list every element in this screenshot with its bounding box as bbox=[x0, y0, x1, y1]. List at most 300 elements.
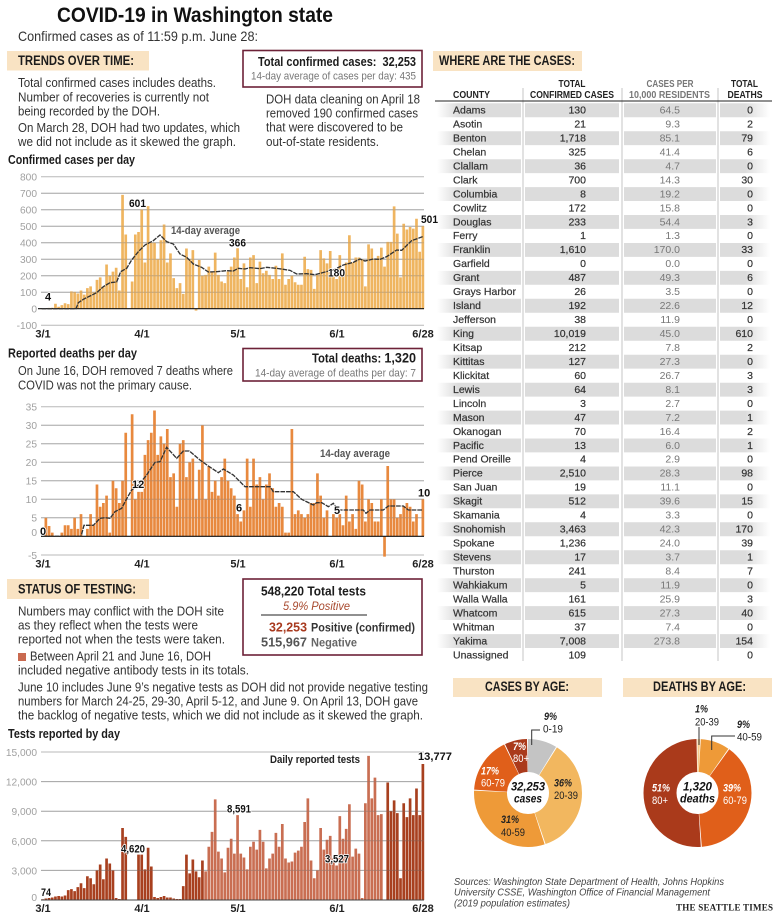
table rows: 14.3 bbox=[660, 174, 680, 186]
text block: DOH data cleaning note: out-of-state residents. bbox=[266, 135, 379, 149]
table header: DEATHS bbox=[728, 89, 762, 101]
table rows: 4.7 bbox=[665, 160, 680, 172]
heading: where are the cases bbox=[433, 51, 582, 71]
callout: total confirmed cases bbox=[243, 50, 422, 87]
table rows: 22.6 bbox=[660, 300, 680, 312]
table rows: 15 bbox=[741, 496, 753, 508]
table rows: Snohomish bbox=[453, 524, 506, 536]
table rows: Mason bbox=[453, 412, 485, 424]
table rows: 130 bbox=[568, 104, 586, 116]
x axis labels: 6/1 bbox=[329, 328, 345, 340]
table rows: San Juan bbox=[453, 482, 498, 494]
heading: status of testing bbox=[7, 579, 149, 599]
donut chart: deaths by age bbox=[652, 704, 762, 830]
callout: total deaths: Total deaths: 1,320 bbox=[312, 350, 416, 366]
table rows: 3.3 bbox=[665, 510, 680, 522]
text block: testing notes: numbers for March 24-25, 29-30, April 5-12, and June 9. On April 13, DOH gave bbox=[18, 695, 418, 709]
table rows: Unassigned bbox=[453, 649, 509, 661]
table rows: 49.3 bbox=[660, 272, 680, 284]
bar chart: confirmed cases per day: 600 bbox=[20, 206, 37, 216]
table rows: 0 bbox=[747, 258, 753, 270]
table rows: Garfield bbox=[453, 258, 490, 270]
table rows: Benton bbox=[453, 132, 486, 144]
slice labels bbox=[481, 711, 578, 839]
text block: trends notes bbox=[17, 76, 240, 149]
table rows: 2,510 bbox=[560, 468, 586, 480]
table rows: 0 bbox=[747, 230, 753, 242]
callout: testing totals: 515,967 bbox=[261, 635, 307, 650]
table rows: 40 bbox=[741, 607, 753, 619]
table rows: 45.0 bbox=[660, 328, 680, 340]
table rows: 325 bbox=[568, 146, 586, 158]
table rows: 0 bbox=[747, 160, 753, 172]
bar chart: confirmed cases per day: 300 bbox=[20, 255, 37, 266]
table rows: 98 bbox=[741, 468, 753, 480]
x axis labels: 3/1 bbox=[35, 559, 51, 571]
bar chart: reported deaths per day: 20 bbox=[26, 458, 37, 469]
table rows: 64 bbox=[574, 384, 586, 396]
table rows: Clark bbox=[453, 174, 478, 186]
table rows: 127 bbox=[568, 356, 586, 368]
value labels bbox=[45, 198, 438, 304]
table rows: 28.3 bbox=[660, 468, 680, 480]
table rows: 54.4 bbox=[660, 216, 680, 228]
table rows: 5 bbox=[580, 580, 586, 592]
slice labels: 40-59 bbox=[501, 827, 525, 839]
table rows: Klickitat bbox=[453, 370, 489, 382]
table rows: 41.4 bbox=[660, 146, 680, 158]
text block: testing notes: June 10 includes June 9’s negative tests as DOH did not provide negative testing bbox=[18, 681, 428, 695]
table rows: 170.0 bbox=[654, 244, 680, 256]
value labels: 12 bbox=[132, 479, 144, 491]
bar chart: confirmed cases per day: 500 bbox=[20, 222, 37, 233]
bar chart: confirmed cases per day: 800 bbox=[20, 172, 37, 184]
table rows: 241 bbox=[568, 566, 586, 578]
bars: daily tests including antibody tests bbox=[206, 756, 381, 900]
credit: The Seattle Times: THE SEATTLE TIMES bbox=[676, 903, 773, 913]
table rows: 39.6 bbox=[660, 496, 680, 508]
text block: testing notes: Numbers may conflict with the DOH site bbox=[18, 605, 224, 619]
table rows: 3 bbox=[580, 398, 586, 410]
callout: total confirmed cases: 14-day average of cases per day: 435 bbox=[251, 70, 416, 82]
bar chart: reported deaths per day: 25 bbox=[26, 440, 37, 451]
table rows: 2.7 bbox=[665, 398, 680, 410]
bar chart: reported deaths per day: 0 bbox=[31, 528, 37, 539]
table rows: Asotin bbox=[453, 118, 482, 130]
bar chart: confirmed cases per day: 0 bbox=[31, 304, 37, 316]
table rows: Jefferson bbox=[453, 314, 496, 326]
table rows: 0.0 bbox=[665, 258, 680, 270]
bars: daily tests bbox=[43, 764, 423, 900]
table rows: Pend Oreille bbox=[453, 454, 511, 466]
bars: daily confirmed cases bbox=[43, 195, 423, 311]
heading: cases by age: CASES BY AGE: bbox=[485, 679, 569, 694]
table rows: Chelan bbox=[453, 146, 486, 158]
x axis labels: 6/1 bbox=[329, 903, 345, 915]
table rows: 0 bbox=[580, 258, 586, 270]
value labels: 6 bbox=[236, 503, 242, 515]
value labels: 0 bbox=[40, 526, 46, 538]
table stripes bbox=[437, 103, 770, 648]
table rows: 7,008 bbox=[560, 635, 586, 647]
table rows: Columbia bbox=[453, 188, 498, 200]
table rows: Pierce bbox=[453, 468, 483, 480]
callout: total confirmed cases: Total confirmed cases: 32,253 bbox=[258, 55, 416, 69]
x axis labels: 3/1 bbox=[35, 328, 51, 340]
table rows: 21 bbox=[574, 118, 586, 130]
table rows: 19.2 bbox=[660, 188, 680, 200]
x axis labels: 3/1 bbox=[35, 903, 51, 915]
x axis labels: 5/1 bbox=[230, 328, 246, 340]
table rows: 172 bbox=[568, 202, 586, 214]
table rows: 27.3 bbox=[660, 356, 680, 368]
x axis labels bbox=[35, 559, 434, 571]
slice labels: 36% bbox=[554, 778, 572, 790]
bar chart: confirmed cases per day: 700 bbox=[20, 189, 37, 200]
sources: (2019 population estimates) bbox=[454, 898, 570, 910]
table rows: 1 bbox=[580, 230, 586, 242]
table rows: Pacific bbox=[453, 440, 484, 452]
subtitle: Confirmed cases as of 11:59 p.m. June 28: bbox=[18, 28, 258, 44]
table rows: 610 bbox=[735, 328, 753, 340]
bar chart: confirmed cases per day: 400 bbox=[20, 238, 37, 250]
value labels: 13,777 bbox=[418, 751, 452, 763]
legend swatch: antibody tests bbox=[18, 653, 26, 661]
slice labels: 1% bbox=[695, 704, 708, 716]
table rows: 0 bbox=[747, 314, 753, 326]
text block: trends notes: we did not include as it skewed the graph. bbox=[17, 135, 236, 149]
table header: CONFIRMED CASES bbox=[530, 89, 614, 101]
table header: 10,000 RESIDENTS bbox=[629, 89, 710, 101]
slice labels: 31% bbox=[501, 814, 519, 826]
text block: trends notes: On March 28, DOH had two updates, which bbox=[18, 121, 240, 135]
table rows: Stevens bbox=[453, 552, 491, 564]
table rows: 1 bbox=[747, 412, 753, 424]
table rows: 8.4 bbox=[665, 566, 680, 578]
bar chart: reported deaths per day: 35 bbox=[26, 403, 37, 414]
table rows: 512 bbox=[568, 496, 586, 508]
text block: testing notes: the backlog of negative tests, which we did not include as it skewed the graph. bbox=[18, 709, 423, 723]
x axis labels: 4/1 bbox=[134, 903, 150, 915]
callout: testing totals: 548,220 Total tests bbox=[261, 585, 366, 599]
table rows: 42.3 bbox=[660, 524, 680, 536]
callout: testing totals: Positive (confirmed) bbox=[311, 621, 415, 635]
bars: daily deaths bbox=[46, 410, 423, 557]
table rows: 2.9 bbox=[665, 454, 680, 466]
table rows bbox=[453, 104, 753, 661]
table rows: 64.5 bbox=[660, 104, 680, 116]
table rows: 109 bbox=[568, 649, 586, 661]
table rows: 4 bbox=[580, 454, 586, 466]
table rows: 26.7 bbox=[660, 370, 680, 382]
heading: deaths by age: DEATHS BY AGE: bbox=[653, 679, 746, 694]
table rows: 24.0 bbox=[660, 538, 680, 550]
table rows: 47 bbox=[574, 412, 586, 424]
table rows: 26 bbox=[574, 286, 586, 298]
x axis labels: 6/28 bbox=[412, 328, 434, 340]
bar chart: reported deaths per day: 10 bbox=[26, 495, 37, 506]
callout: total deaths bbox=[243, 348, 422, 381]
bar chart: tests reported by day: 9,000 bbox=[12, 807, 37, 818]
table rows: 1.3 bbox=[665, 230, 680, 242]
table rows: 7.8 bbox=[665, 342, 680, 354]
table rows: 2 bbox=[747, 118, 753, 130]
x axis labels: 5/1 bbox=[230, 903, 246, 915]
table rows: 2 bbox=[747, 426, 753, 438]
table rows: 36 bbox=[574, 160, 586, 172]
heading: deaths by age bbox=[623, 678, 772, 697]
donut center total bbox=[680, 780, 715, 806]
slice labels bbox=[652, 704, 762, 807]
table rows: 1,610 bbox=[560, 244, 586, 256]
line: 14-day average of deaths bbox=[43, 447, 423, 536]
table rows: 273.8 bbox=[654, 635, 680, 647]
text block: DOH data cleaning note: removed 190 confirmed cases bbox=[266, 106, 418, 120]
table rows: 0 bbox=[747, 454, 753, 466]
text block: trends notes: being recorded by the DOH. bbox=[18, 104, 160, 118]
table rows: 30 bbox=[741, 174, 753, 186]
slice labels: 9% bbox=[737, 719, 750, 731]
table rows: 79 bbox=[741, 132, 753, 144]
text block: deaths note: COVID was not the primary cause. bbox=[18, 379, 192, 393]
x axis labels: 4/1 bbox=[134, 559, 150, 571]
table rows: 85.1 bbox=[660, 132, 680, 144]
table rows: 39 bbox=[741, 538, 753, 550]
slice labels: 60-79 bbox=[723, 795, 747, 807]
text block: DOH data cleaning note: that were discovered to be bbox=[266, 120, 403, 134]
table rows: 19 bbox=[574, 482, 586, 494]
table rows: 487 bbox=[568, 272, 586, 284]
table rows: 25.9 bbox=[660, 593, 680, 605]
slice labels: 40-59 bbox=[737, 732, 762, 744]
text block: testing notes bbox=[18, 605, 428, 723]
table rows: 16.4 bbox=[660, 426, 680, 438]
table rows: 11.9 bbox=[660, 314, 680, 326]
value labels: 10 bbox=[418, 488, 430, 500]
table rows: 1,718 bbox=[560, 132, 586, 144]
value labels: 366 bbox=[229, 238, 246, 250]
table rows: Franklin bbox=[453, 244, 491, 256]
bar chart: tests reported by day: 0 bbox=[31, 893, 37, 904]
value labels: 180 bbox=[328, 268, 345, 280]
slice labels: 9% bbox=[544, 711, 557, 723]
slice labels: 20-39 bbox=[695, 716, 719, 728]
x axis labels: 6/28 bbox=[412, 903, 434, 915]
table rows: 33 bbox=[741, 244, 753, 256]
table rows: 11.9 bbox=[660, 580, 680, 592]
sources: Sources: Washington State Department of Health, Johns Hopkins bbox=[454, 876, 725, 888]
table rows: 60 bbox=[574, 370, 586, 382]
table rows: Cowlitz bbox=[453, 202, 487, 214]
table rows: Island bbox=[453, 300, 481, 312]
table rows: 6 bbox=[747, 272, 753, 284]
table rows: Kittitas bbox=[453, 356, 485, 368]
bar chart: reported deaths per day: 5 bbox=[31, 514, 37, 525]
donut center total: 1,320 bbox=[683, 780, 712, 794]
table rows: 3 bbox=[747, 384, 753, 396]
x axis labels bbox=[35, 903, 434, 915]
table rows: 1,236 bbox=[560, 538, 586, 550]
table: cases by county bbox=[435, 78, 772, 661]
table rows: 8 bbox=[580, 188, 586, 200]
heading: trends over time: TRENDS OVER TIME: bbox=[18, 53, 134, 68]
text block: trends notes: Total confirmed cases includes deaths. bbox=[18, 76, 216, 90]
table rows: 3 bbox=[747, 216, 753, 228]
callout: total deaths: 14-day average of deaths per day: 7 bbox=[255, 368, 416, 380]
label: 14-day average: 14-day average bbox=[171, 225, 240, 237]
table rows: 170 bbox=[735, 524, 753, 536]
x axis labels: 6/28 bbox=[412, 559, 434, 571]
slice labels: 17% bbox=[481, 766, 499, 778]
x axis labels: 5/1 bbox=[230, 559, 246, 571]
text block: testing notes: Between April 21 and June 16, DOH bbox=[30, 650, 211, 664]
table rows: 0 bbox=[747, 621, 753, 633]
value labels: 3,527 bbox=[325, 853, 349, 865]
table rows: 7 bbox=[747, 566, 753, 578]
table rows: Adams bbox=[453, 104, 486, 116]
table rows: 11.1 bbox=[660, 482, 680, 494]
table rows: 13 bbox=[574, 440, 586, 452]
x axis labels bbox=[35, 328, 434, 340]
table rows: Spokane bbox=[453, 538, 495, 550]
table rows: 3.7 bbox=[665, 552, 680, 564]
table rows: Okanogan bbox=[453, 426, 502, 438]
table rows: 700 bbox=[568, 174, 586, 186]
bar chart: confirmed cases per day: 200 bbox=[20, 272, 37, 282]
x axis labels: 4/1 bbox=[134, 328, 150, 340]
value labels: 5 bbox=[334, 505, 340, 517]
bar chart: tests reported by day bbox=[6, 748, 452, 915]
table rows: Ferry bbox=[453, 230, 478, 242]
slice labels: 60-79 bbox=[481, 778, 505, 790]
table rows: Kitsap bbox=[453, 342, 482, 354]
bar chart: confirmed cases per day: -100 bbox=[17, 321, 37, 332]
bar chart: tests reported by day: 3,000 bbox=[12, 866, 37, 877]
table rows: 3,463 bbox=[560, 524, 586, 536]
slice labels: 7% bbox=[513, 741, 526, 753]
table rows: 3 bbox=[747, 593, 753, 605]
table rows: 27.3 bbox=[660, 607, 680, 619]
label: 14-day average: 14-day average bbox=[320, 448, 390, 460]
table rows: 0 bbox=[747, 580, 753, 592]
slice labels: 51% bbox=[652, 783, 670, 795]
chart title: confirmed cases per day: Confirmed cases per day bbox=[8, 153, 135, 167]
table rows: 1 bbox=[747, 552, 753, 564]
chart title: reported deaths per day: Reported deaths per day bbox=[8, 347, 137, 361]
text block: DOH data cleaning note bbox=[266, 92, 420, 149]
table rows: Thurston bbox=[453, 566, 495, 578]
table rows: 0 bbox=[747, 398, 753, 410]
x axis labels: 6/1 bbox=[329, 559, 345, 571]
table rows: 0 bbox=[747, 104, 753, 116]
table rows: 233 bbox=[568, 216, 586, 228]
table rows: Walla Walla bbox=[453, 593, 508, 605]
table rows: 38 bbox=[574, 314, 586, 326]
table rows: 0 bbox=[747, 202, 753, 214]
table rows: 212 bbox=[568, 342, 586, 354]
text block: deaths note bbox=[18, 364, 233, 393]
table rows: 615 bbox=[568, 607, 586, 619]
heading: cases by age bbox=[453, 678, 602, 697]
table rows: Clallam bbox=[453, 160, 488, 172]
bar chart: tests reported by day: 6,000 bbox=[12, 837, 37, 848]
text block: testing notes: reported not when the tests were taken. bbox=[18, 633, 225, 647]
sources: University CSSE, Washington Office of Financial Management bbox=[454, 887, 711, 899]
donut center total: 32,253 bbox=[511, 780, 545, 794]
value labels: 601 bbox=[129, 198, 146, 210]
table rows: 15.8 bbox=[660, 202, 680, 214]
text block: testing notes: as they reflect when the tests were bbox=[18, 619, 198, 633]
table rows: 7.4 bbox=[665, 621, 680, 633]
table header: TOTAL bbox=[731, 78, 758, 90]
heading: trends over time bbox=[7, 51, 149, 70]
table rows: King bbox=[453, 328, 474, 340]
table rows: Lincoln bbox=[453, 398, 486, 410]
bar chart: tests reported by day: 15,000 bbox=[6, 748, 37, 759]
table rows: Douglas bbox=[453, 216, 492, 228]
table header: TOTAL bbox=[558, 78, 586, 90]
table rows: 17 bbox=[574, 552, 586, 564]
text block: trends notes: Number of recoveries is currently not bbox=[18, 90, 209, 104]
callout: testing totals: Negative bbox=[311, 636, 357, 650]
label: daily reported tests: Daily reported tests bbox=[270, 754, 360, 766]
table rows: 3.5 bbox=[665, 286, 680, 298]
table rows: 7.2 bbox=[665, 412, 680, 424]
line: 14-day average of cases bbox=[42, 235, 423, 309]
text block: DOH data cleaning note: DOH data cleaning on April 18 bbox=[266, 92, 420, 106]
table rows: 0 bbox=[747, 356, 753, 368]
bar chart: reported deaths per day: 15 bbox=[26, 477, 37, 488]
table rows: 0 bbox=[747, 482, 753, 494]
table rows: 154 bbox=[735, 635, 753, 647]
value labels bbox=[40, 479, 430, 538]
sources bbox=[454, 876, 725, 910]
table rows: 161 bbox=[568, 593, 586, 605]
table rows: 4 bbox=[580, 510, 586, 522]
value labels: 74 bbox=[41, 887, 52, 899]
table rows: 70 bbox=[574, 426, 586, 438]
slice labels: 20-39 bbox=[554, 790, 578, 802]
heading: status of testing: STATUS OF TESTING: bbox=[18, 581, 136, 596]
table rows: 12 bbox=[741, 300, 753, 312]
table rows: Grant bbox=[453, 272, 479, 284]
table rows: 3 bbox=[747, 370, 753, 382]
table rows: 0 bbox=[747, 188, 753, 200]
table rows: 192 bbox=[568, 300, 586, 312]
table rows: 0 bbox=[747, 286, 753, 298]
table rows: 6 bbox=[747, 146, 753, 158]
slice labels: 80+ bbox=[513, 753, 529, 765]
bar chart: reported deaths per day bbox=[26, 403, 434, 571]
bar chart: reported deaths per day: -5 bbox=[28, 551, 37, 562]
table header bbox=[453, 78, 762, 101]
donut center total: cases bbox=[514, 792, 542, 806]
table header: CASES PER bbox=[646, 78, 694, 90]
table rows: 2 bbox=[747, 342, 753, 354]
chart title: tests reported by day: Tests reported by day bbox=[8, 727, 120, 741]
table rows: 1 bbox=[747, 440, 753, 452]
table rows: 0 bbox=[747, 649, 753, 661]
table rows: 10,019 bbox=[554, 328, 586, 340]
table header: COUNTY bbox=[453, 89, 490, 101]
text block: testing notes: included negative antibody tests in its totals. bbox=[18, 664, 249, 678]
value labels: 8,591 bbox=[227, 804, 251, 816]
callout: testing totals: 32,253 bbox=[269, 620, 307, 635]
slice labels: 0-19 bbox=[543, 724, 563, 736]
value labels bbox=[41, 751, 452, 899]
table rows: Lewis bbox=[453, 384, 480, 396]
callout: testing totals bbox=[243, 579, 422, 655]
